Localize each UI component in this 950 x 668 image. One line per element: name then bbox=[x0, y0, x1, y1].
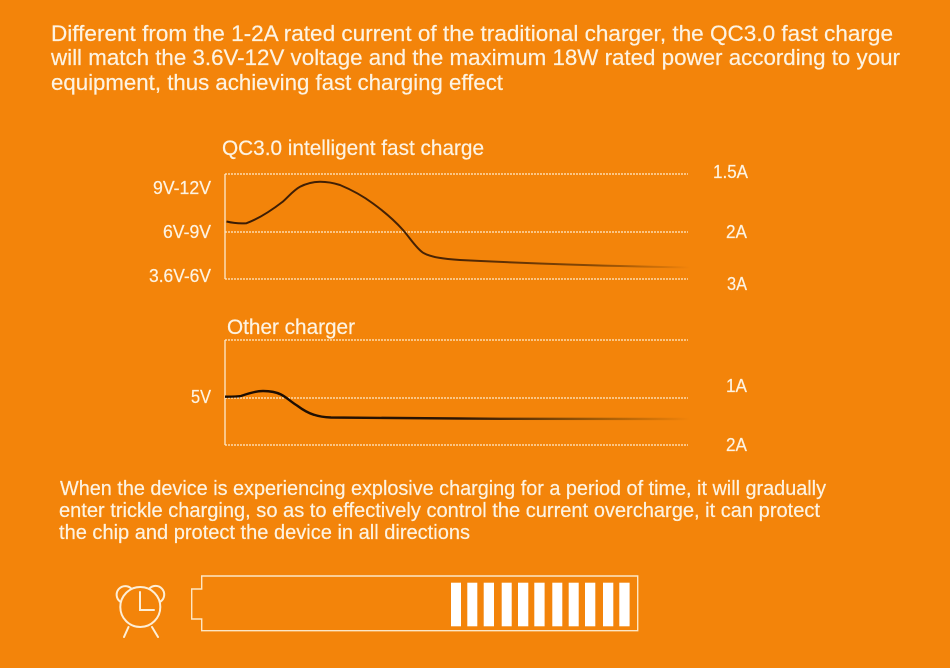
battery charge bars bbox=[451, 583, 630, 626]
explanation text: the chip and protect the device in all directions bbox=[59, 522, 470, 544]
current labels: 1A bbox=[726, 376, 747, 396]
current labels bbox=[713, 162, 748, 294]
chart: Other charger bbox=[191, 316, 747, 455]
icon: alarm clock bbox=[117, 586, 164, 637]
explanation text: When the device is experiencing explosive charging for a period of time, it will gradually bbox=[60, 478, 826, 500]
battery outline bbox=[192, 576, 638, 631]
icon: battery bbox=[192, 576, 638, 631]
voltage labels: 9V-12V bbox=[153, 178, 211, 198]
current labels: 3A bbox=[727, 274, 747, 294]
intro text: equipment, thus achieving fast charging effect bbox=[51, 70, 503, 95]
intro text: Different from the 1-2A rated current of the traditional charger, the QC3.0 fast charge bbox=[51, 21, 893, 46]
charging curve bbox=[225, 391, 690, 419]
explanation text bbox=[59, 478, 826, 544]
voltage labels: 3.6V-6V bbox=[149, 266, 211, 286]
axes and grid lines bbox=[225, 340, 688, 445]
current labels: 2A bbox=[726, 435, 747, 455]
current labels bbox=[726, 376, 747, 455]
voltage labels bbox=[149, 178, 211, 286]
voltage labels: 6V-9V bbox=[163, 222, 211, 242]
current labels: 1.5A bbox=[713, 162, 748, 182]
intro text: will match the 3.6V-12V voltage and the maximum 18W rated power according to your bbox=[50, 45, 900, 70]
chart: QC3.0 intelligent fast charge bbox=[149, 137, 748, 294]
axes and grid lines bbox=[225, 174, 688, 279]
chart title: QC3.0 intelligent fast charge bbox=[222, 137, 484, 160]
current labels: 2A bbox=[726, 222, 747, 242]
charging curve bbox=[226, 182, 690, 268]
intro text bbox=[50, 21, 900, 95]
chart title: Other charger bbox=[227, 316, 355, 339]
explanation text: enter trickle charging, so as to effectively control the current overcharge, it can protect bbox=[59, 500, 820, 522]
voltage label: 5V bbox=[191, 387, 211, 407]
